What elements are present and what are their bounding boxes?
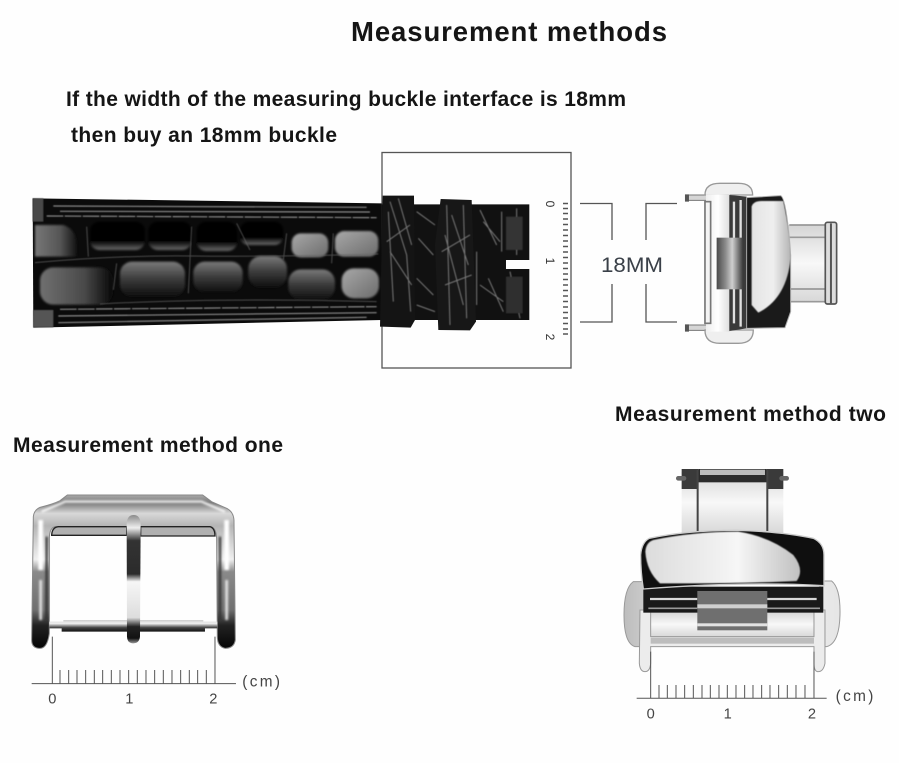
scale label 0: 0 [647, 706, 655, 722]
keeper two [435, 199, 476, 330]
spring bar knobs [685, 194, 689, 332]
ruler [32, 637, 236, 684]
instruction line one: If the width of the measuring buckle interface is 18mm [66, 88, 626, 111]
inner strip [705, 202, 711, 323]
top bracket [678, 469, 787, 533]
scale creases [35, 223, 378, 304]
right bracket [646, 204, 677, 322]
scale label 2: 2 [808, 706, 816, 722]
heading: method one: Measurement method one [13, 434, 283, 457]
frame highlights [41, 502, 227, 620]
unit label: (cm) [242, 674, 280, 691]
ruler [637, 652, 827, 698]
measuring frame [382, 152, 571, 368]
deployment buckle side view [685, 183, 837, 343]
right bracket [788, 222, 837, 304]
strap end tab bottom [33, 310, 53, 327]
ruler label 2: 2 [543, 334, 557, 341]
cover plate [641, 530, 824, 589]
end caps [705, 183, 753, 343]
strap tip with keepers [380, 196, 529, 330]
watch strap [33, 198, 382, 328]
scale label 2: 2 [209, 691, 217, 707]
strap tip [382, 204, 529, 320]
instruction line two: then buy an 18mm buckle [71, 124, 337, 147]
inner shadow strip [52, 527, 215, 536]
stitched edge lines [47, 206, 377, 323]
unit label: (cm) [836, 688, 873, 705]
tongue [127, 515, 141, 643]
deployment buckle method two [624, 469, 873, 722]
pillar [706, 194, 730, 332]
croc scales [35, 222, 379, 305]
keeper one [380, 196, 415, 328]
ruler on frame [543, 201, 568, 341]
scale label 1: 1 [724, 706, 732, 722]
hinge section [729, 195, 747, 331]
scale label 0: 0 [48, 691, 56, 707]
ruler label 0: 0 [543, 201, 557, 208]
tip texture [417, 208, 523, 318]
spring bars [687, 195, 707, 330]
polished panel [752, 201, 791, 313]
18mm dimension [580, 204, 677, 322]
left bracket [580, 204, 612, 322]
polished panel [645, 532, 800, 583]
tick marks [563, 204, 568, 334]
title: Measurement methods [351, 16, 667, 47]
buckle frame [32, 495, 235, 648]
hinge tube [697, 591, 767, 630]
side ears [624, 581, 840, 647]
scale label 1: 1 [125, 691, 133, 707]
strap end tab top [33, 198, 43, 222]
lower bar [639, 610, 825, 672]
clasp body [641, 612, 823, 637]
pin buckle method one [32, 495, 280, 707]
strap body [33, 198, 382, 328]
cover plate [747, 196, 791, 328]
dimension label: 18MM [601, 254, 663, 277]
hinge recess [643, 587, 823, 613]
hinge tube [717, 238, 743, 289]
ruler label 1: 1 [543, 258, 557, 265]
heading: method two: Measurement method two [615, 403, 886, 426]
spring bar [49, 620, 217, 632]
